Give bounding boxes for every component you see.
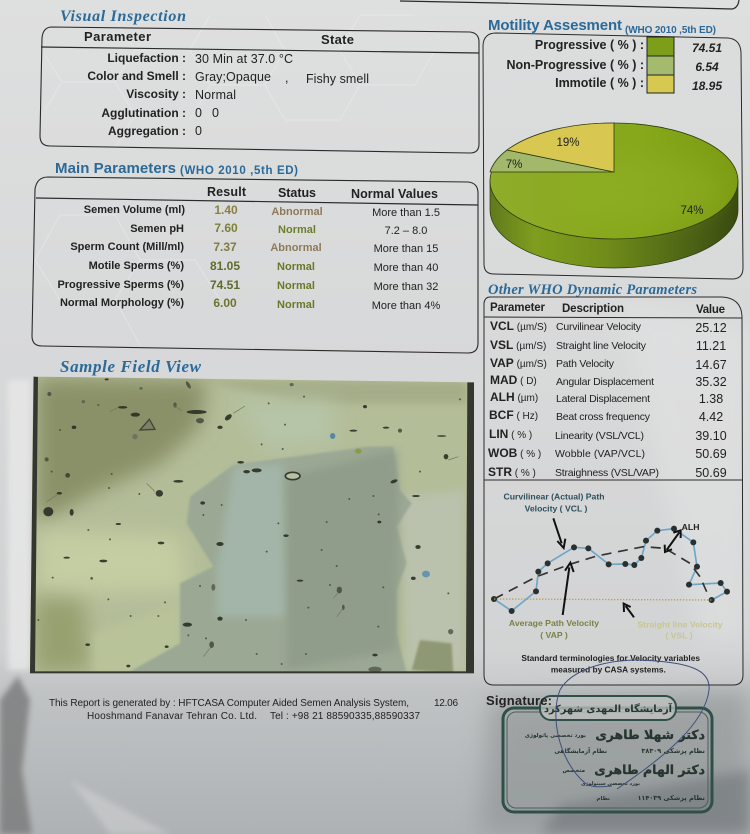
pie chart bbox=[490, 123, 738, 268]
table rows: Angular Displacement bbox=[556, 376, 654, 388]
status values: Normal bbox=[277, 280, 315, 292]
inspection rows: Agglutination : bbox=[101, 106, 186, 120]
legend: 74.51 bbox=[692, 41, 722, 55]
table rows: VCL (µm/S) bbox=[490, 319, 547, 333]
table header: Normal Values bbox=[351, 187, 438, 201]
legend: Immotile ( % ) : bbox=[555, 76, 644, 90]
panel: visual inspection table bbox=[40, 27, 479, 153]
parameter labels: Sperm Count (Mill/ml) bbox=[70, 241, 184, 253]
stamp text: نظام پزشکی ۳۸۳۰۹ bbox=[641, 747, 705, 755]
parameter labels: Semen pH bbox=[130, 223, 184, 235]
pie chart: 19% bbox=[556, 137, 580, 149]
diagram labels: Standard terminologies for Velocity variables bbox=[521, 653, 700, 663]
heading: Main Parameters: (WHO 2010 ,5th ED) bbox=[180, 165, 298, 177]
legend: 6.54 bbox=[695, 60, 719, 74]
heading: Main Parameters bbox=[55, 160, 298, 177]
footer report text: Hooshmand Fanavar Tehran Co. Ltd. bbox=[87, 711, 257, 722]
panel: dynamic parameters bbox=[484, 297, 743, 685]
footer report text: This Report is generated by : HFTCASA Computer Aided Semen Analysis System, bbox=[49, 698, 409, 709]
table rows: 4.42 bbox=[699, 410, 723, 424]
signature label: Signature: bbox=[486, 693, 552, 708]
heading: Other WHO Dynamic Parameters: Other WHO Dynamic Parameters bbox=[488, 282, 697, 298]
parameter labels: Motile Sperms (%) bbox=[89, 260, 184, 272]
stamp text: نظام آزمایشگاهی bbox=[554, 746, 607, 755]
sperm cells and debris bbox=[37, 378, 461, 672]
parameter labels: Normal Morphology (%) bbox=[60, 297, 184, 309]
table rows: Lateral Displacement bbox=[556, 393, 650, 405]
inspection rows: Normal bbox=[195, 88, 236, 102]
table rows: 1.38 bbox=[699, 392, 723, 406]
normal values: 7.2 – 8.0 bbox=[385, 225, 427, 237]
normal values: More than 32 bbox=[374, 281, 438, 293]
diagram labels: ( VAP ) bbox=[540, 630, 568, 640]
table rows: Beat cross frequency bbox=[556, 411, 651, 423]
table rows bbox=[488, 319, 727, 480]
result values: 1.40 bbox=[214, 203, 238, 217]
image lighting and shadows bbox=[35, 378, 467, 673]
VSL dotted path bbox=[494, 597, 712, 602]
parameter labels: Semen Volume (ml) bbox=[84, 204, 185, 216]
inspection rows: 0 bbox=[195, 106, 202, 120]
stamp text: متخصص bbox=[562, 768, 585, 774]
stamp text: آزمایشگاه المهدی شهرکرد bbox=[544, 702, 673, 715]
table rows: VAP (µm/S) bbox=[490, 356, 547, 370]
inspection rows: , bbox=[285, 71, 288, 85]
panel: main parameters table bbox=[32, 177, 478, 353]
diagram labels: ( VSL ) bbox=[665, 631, 693, 641]
table rows: LIN ( % ) bbox=[489, 427, 532, 441]
status values: Normal bbox=[277, 261, 315, 273]
heading: Sample Field View: Sample Field View bbox=[60, 357, 202, 376]
table header: Parameter bbox=[84, 29, 151, 44]
table rows: 50.69 bbox=[695, 447, 727, 461]
result values: 7.37 bbox=[213, 240, 237, 254]
table rows: BCF ( Hz) bbox=[489, 408, 538, 422]
inspection rows bbox=[87, 51, 369, 138]
normal values: More than 40 bbox=[374, 262, 438, 274]
table header: Status bbox=[278, 186, 316, 200]
footer report text bbox=[49, 698, 458, 722]
stamp text: بورد تخصصی سیتولوژی bbox=[581, 781, 640, 787]
footer report text: Tel : +98 21 88590335,88590337 bbox=[270, 711, 420, 722]
result values bbox=[210, 203, 240, 310]
stamp bbox=[503, 696, 712, 812]
table rows: MAD ( D) bbox=[490, 373, 537, 387]
inspection rows: Aggregation : bbox=[108, 124, 186, 138]
normal values: More than 1.5 bbox=[372, 207, 440, 219]
table rows: Linearity (VSL/VCL) bbox=[555, 430, 644, 442]
result values: 6.00 bbox=[213, 296, 237, 310]
stamp text: نظام پزشکی ۱۱۴۰۳۹ bbox=[637, 794, 705, 802]
heading: Motility Assesment bbox=[488, 17, 716, 36]
table rows: Wobble (VAP/VCL) bbox=[555, 448, 645, 460]
diagram labels: ALH bbox=[682, 522, 699, 532]
heading: Motility Assesment: (WHO 2010 ,5th ED) bbox=[625, 25, 716, 36]
table rows: Straight line Velocity bbox=[556, 340, 647, 352]
parameter labels: Progressive Sperms (%) bbox=[57, 279, 184, 291]
legend: Progressive ( % ) : bbox=[535, 38, 644, 52]
legend: Non-Progressive ( % ) : bbox=[506, 58, 644, 72]
table rows: 50.69 bbox=[695, 466, 727, 480]
inspection rows: 0 bbox=[195, 124, 202, 138]
diagram labels: Average Path Velocity bbox=[509, 618, 599, 628]
diagram labels: Straight line Velocity bbox=[637, 620, 723, 630]
table header bbox=[490, 302, 725, 316]
result values: 7.60 bbox=[214, 221, 238, 235]
table rows: 14.67 bbox=[695, 358, 727, 372]
parameter labels bbox=[57, 204, 185, 309]
table rows: VSL (µm/S) bbox=[490, 338, 546, 352]
diagram labels: Velocity ( VCL ) bbox=[525, 504, 588, 514]
table header bbox=[207, 185, 438, 201]
VCL path bbox=[491, 526, 730, 614]
stamp text: دکتر الهام طاهری bbox=[594, 762, 705, 778]
heading: Visual Inspection: Visual Inspection bbox=[60, 8, 186, 25]
table rows: Straighness (VSL/VAP) bbox=[555, 467, 659, 479]
normal values: More than 4% bbox=[372, 300, 440, 312]
velocity diagram bbox=[491, 492, 730, 675]
stamp text: دکتر شهلا طاهری bbox=[595, 727, 705, 742]
table header: Value bbox=[696, 304, 725, 316]
result values: 81.05 bbox=[210, 259, 240, 273]
legend: 18.95 bbox=[692, 79, 722, 93]
image frame bars bbox=[30, 377, 474, 673]
status values: Abnormal bbox=[270, 242, 322, 254]
result values: 74.51 bbox=[210, 278, 240, 292]
table rows: 11.21 bbox=[696, 339, 726, 353]
table rows: ALH (µm) bbox=[490, 390, 538, 404]
table header: Result bbox=[207, 185, 247, 199]
table rows: WOB ( % ) bbox=[488, 446, 541, 460]
table rows: 39.10 bbox=[695, 429, 727, 443]
diagram labels: Curvilinear (Actual) Path bbox=[503, 492, 605, 502]
legend bbox=[506, 37, 722, 93]
heading: Motility Assesment: Motility Assesment bbox=[488, 17, 622, 34]
footer report text: 12.06 bbox=[434, 698, 458, 709]
inspection rows: Color and Smell : bbox=[87, 69, 186, 83]
inspection rows: 30 Min at 37.0 °C bbox=[195, 52, 293, 66]
table rows: Path Velocity bbox=[556, 358, 615, 370]
heading: Main Parameters: Main Parameters bbox=[55, 160, 176, 177]
stamp text: نظام bbox=[596, 796, 610, 802]
microscope field image bbox=[30, 377, 474, 673]
table rows: Curvilinear Velocity bbox=[556, 321, 642, 333]
table rows: STR ( % ) bbox=[488, 465, 536, 479]
arrows bbox=[553, 518, 681, 617]
status values: Normal bbox=[277, 299, 315, 311]
normal values bbox=[372, 207, 440, 312]
inspection rows: Gray;Opaque bbox=[195, 70, 271, 84]
inspection rows: Viscosity : bbox=[126, 87, 186, 101]
status values: Abnormal bbox=[271, 206, 323, 218]
table header: Parameter bbox=[490, 302, 546, 314]
table header bbox=[84, 29, 354, 47]
table rows: 35.32 bbox=[695, 375, 727, 389]
inspection rows: Fishy smell bbox=[306, 72, 369, 86]
inspection rows: Liquefaction : bbox=[107, 51, 186, 65]
table header: Description bbox=[562, 303, 624, 315]
pie chart: 74% bbox=[680, 205, 704, 217]
diagram labels bbox=[503, 492, 723, 675]
status values: Normal bbox=[278, 224, 316, 236]
inspection rows: 0 bbox=[212, 106, 219, 120]
table header: State bbox=[321, 32, 354, 47]
stamp text: بورد تخصصی پاتولوژی bbox=[525, 733, 586, 739]
table rows: 25.12 bbox=[695, 321, 727, 335]
panel: motility bbox=[483, 33, 743, 279]
pie chart: 7% bbox=[506, 159, 522, 171]
diagram labels: measured by CASA systems. bbox=[551, 665, 666, 675]
VAP dashed path bbox=[494, 547, 707, 599]
status values bbox=[270, 206, 323, 311]
normal values: More than 15 bbox=[374, 243, 438, 255]
stamp text bbox=[525, 702, 705, 802]
handwritten signature bbox=[556, 660, 709, 789]
